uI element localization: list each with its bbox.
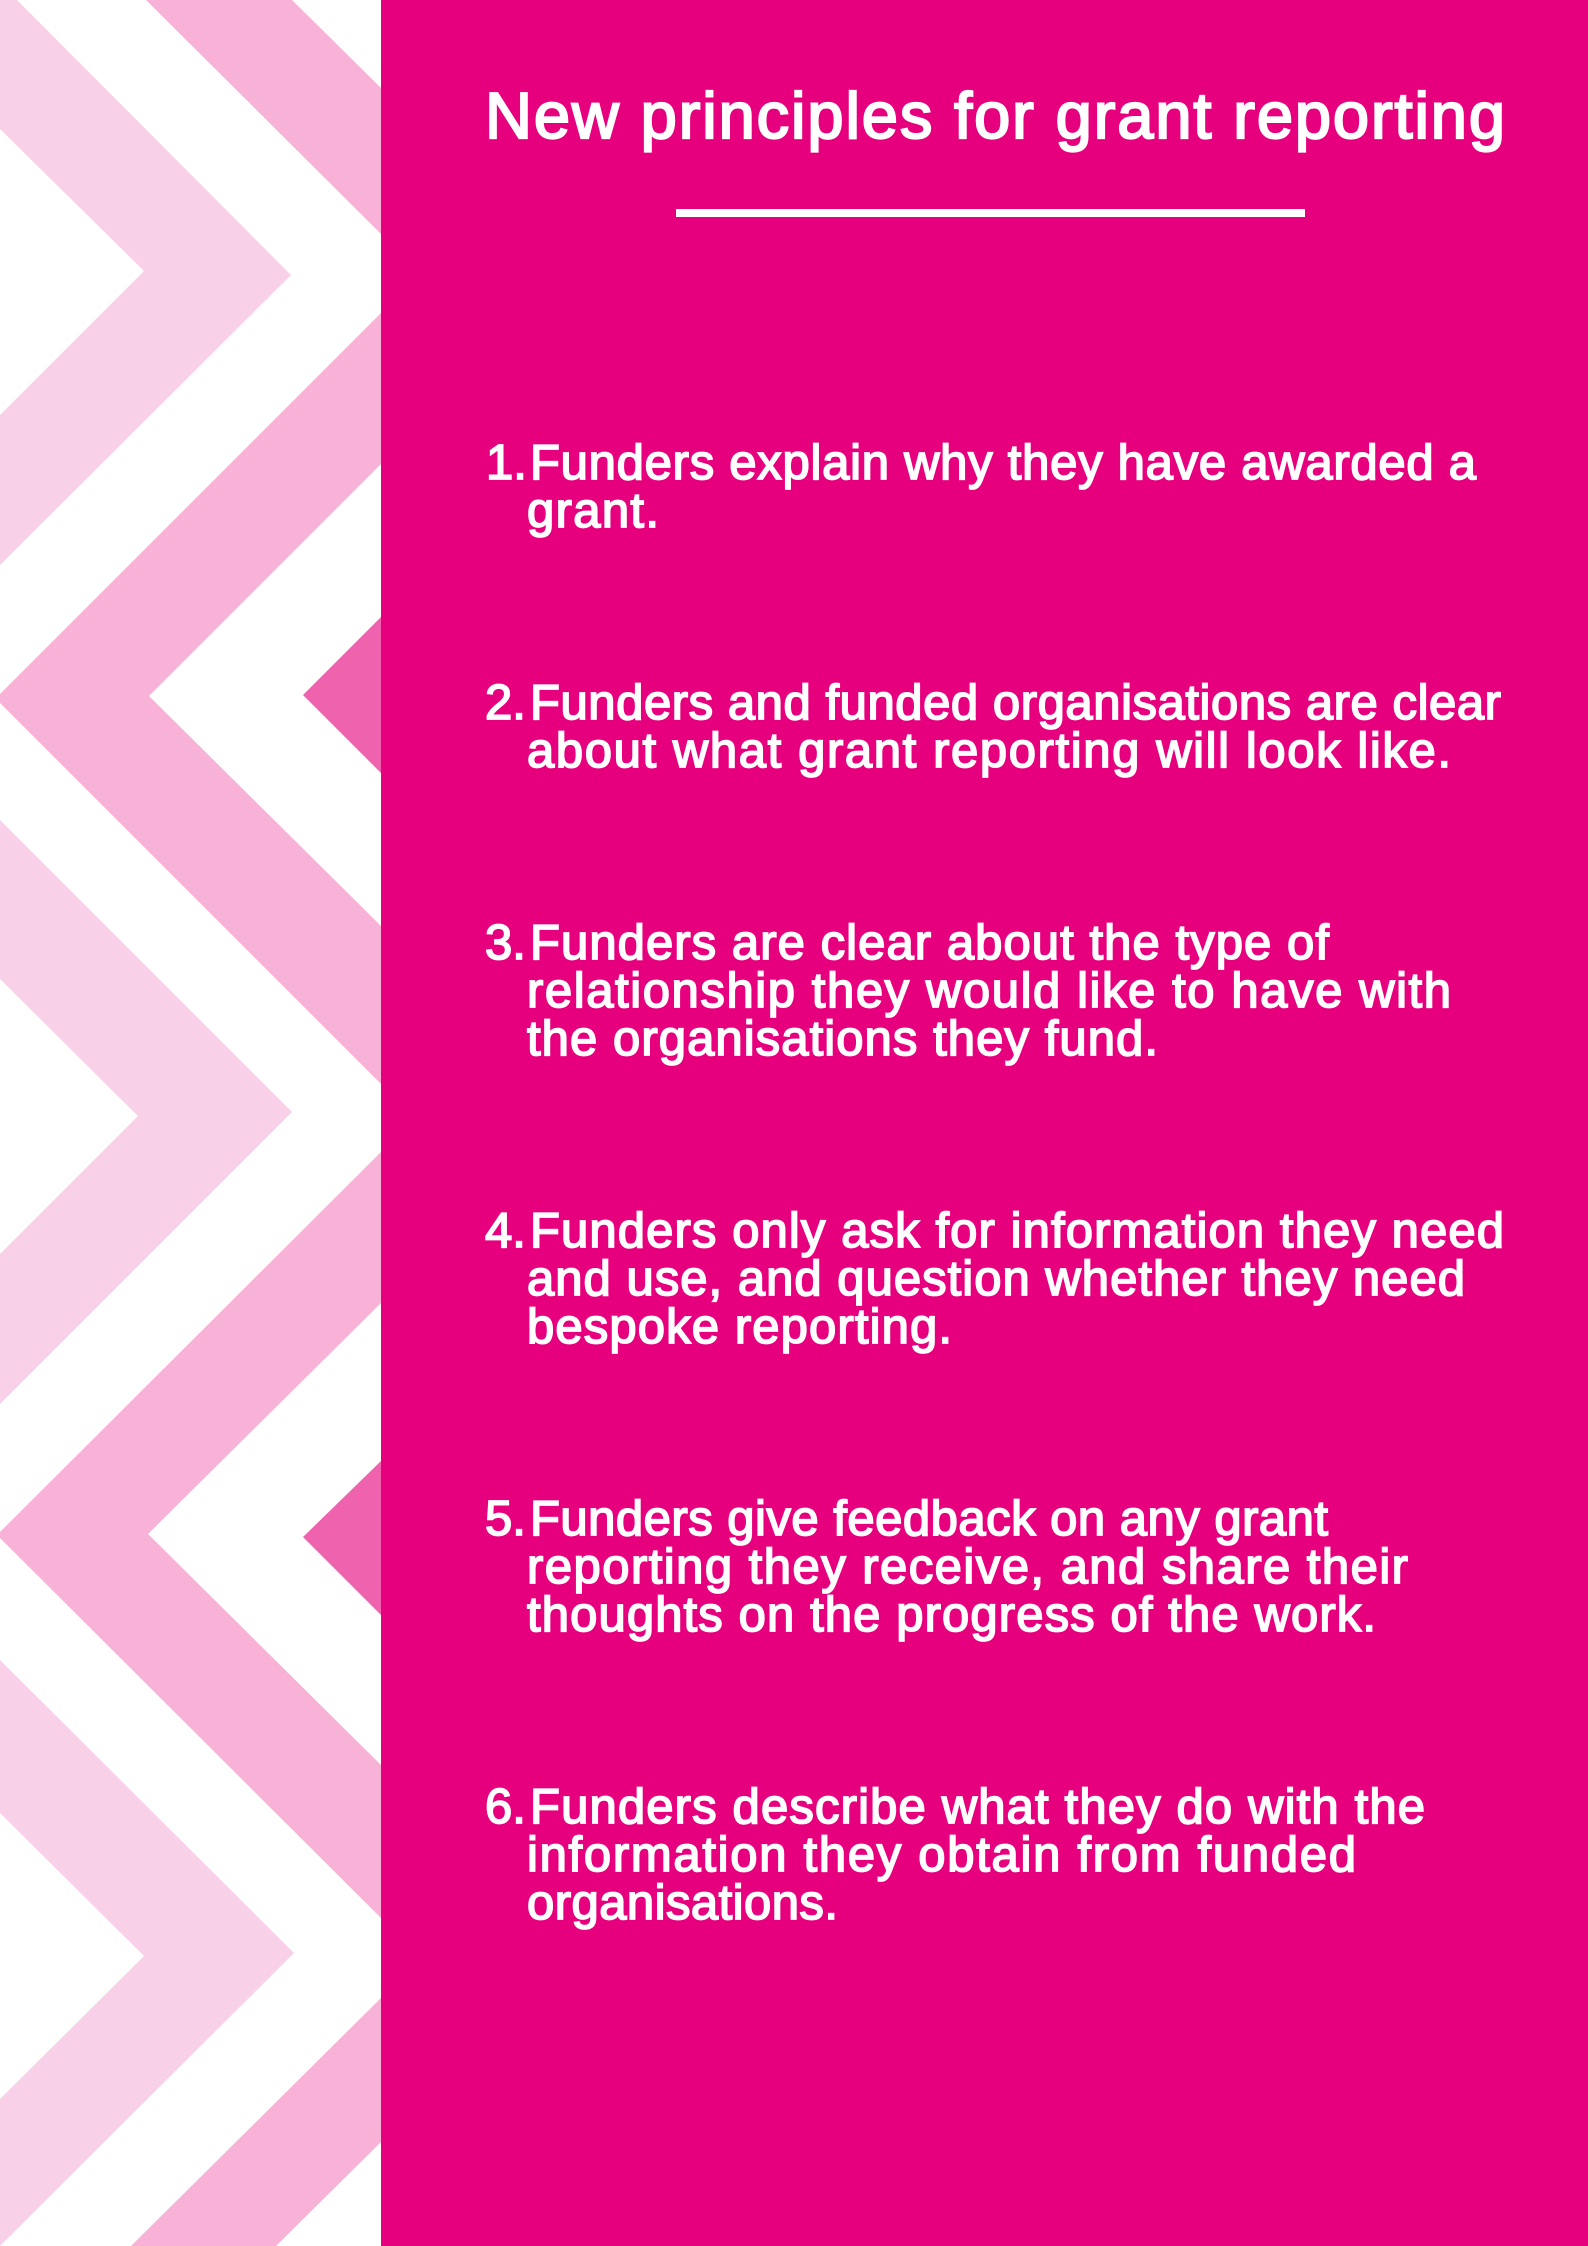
- principle 5: 5.: [485, 1492, 526, 1546]
- principle 3: relationship they would like to have with: [527, 964, 1451, 1018]
- title divider rule: [676, 209, 1305, 217]
- principle 4: Funders only ask for information they need: [530, 1204, 1504, 1258]
- principle 1: Funders explain why they have awarded a: [530, 436, 1477, 490]
- principle 3: Funders are clear about the type of: [530, 916, 1329, 970]
- panel: magenta content panel: [381, 0, 1588, 2246]
- principle 3: 3.: [485, 916, 526, 970]
- principle 3: the organisations they fund.: [527, 1012, 1158, 1066]
- principle 6: [485, 1780, 1425, 1930]
- principle 1: [486, 436, 1477, 538]
- principle 2: [485, 676, 1501, 778]
- principle 2: 2.: [485, 676, 526, 730]
- panel: chevron background: [0, 0, 381, 2246]
- principle 1: 1.: [486, 436, 527, 490]
- principle 5: Funders give feedback on any grant: [530, 1492, 1328, 1546]
- principle 6: organisations.: [527, 1876, 838, 1930]
- principle 5: reporting they receive, and share their: [527, 1540, 1408, 1594]
- principle 6: information they obtain from funded: [527, 1828, 1356, 1882]
- principle 6: Funders describe what they do with the: [530, 1780, 1425, 1834]
- principle 2: about what grant reporting will look like.: [527, 724, 1451, 778]
- principle 4: [485, 1204, 1504, 1354]
- principle 1: grant.: [527, 484, 659, 538]
- principle 5: [485, 1492, 1408, 1642]
- principle 2: Funders and funded organisations are clear: [530, 676, 1501, 730]
- principle 3: [485, 916, 1451, 1066]
- principle 5: thoughts on the progress of the work.: [527, 1588, 1376, 1642]
- title: New principles for grant reporting: [485, 79, 1505, 152]
- principle 4: 4.: [485, 1204, 526, 1258]
- principle 4: bespoke reporting.: [527, 1300, 952, 1354]
- principle 4: and use, and question whether they need: [527, 1252, 1465, 1306]
- principle 6: 6.: [485, 1780, 526, 1834]
